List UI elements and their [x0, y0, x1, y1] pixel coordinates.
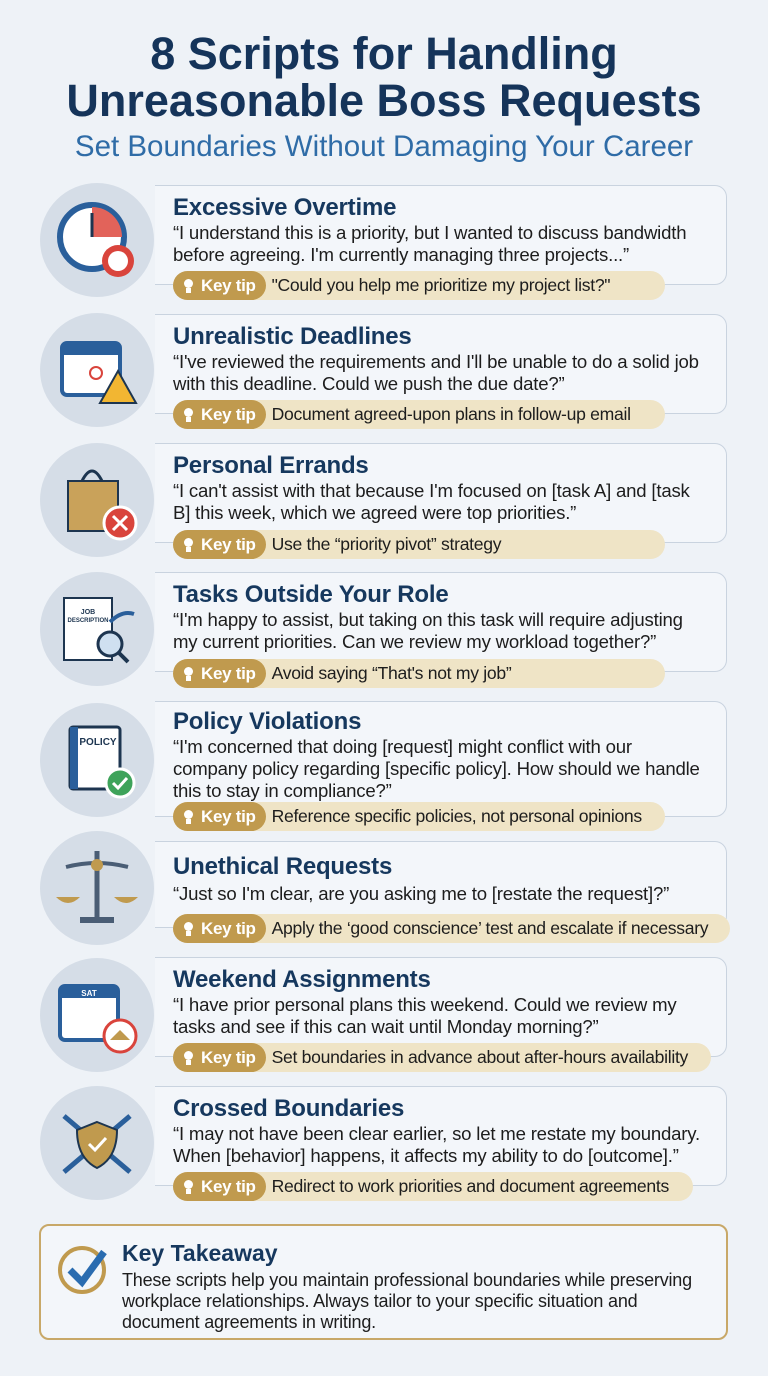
text 3: [173, 480, 690, 523]
card 5: [155, 701, 727, 817]
text 5: “I'm concerned that doing [request] might conflict with our: [173, 736, 632, 757]
card 7: [155, 957, 727, 1057]
icon: clock: [40, 183, 154, 297]
tip 3: Key tip: [201, 535, 256, 554]
card 6: [155, 841, 727, 928]
text 1: before agreeing. I'm currently managing three projects...”: [173, 244, 629, 265]
icon: policy book: [40, 703, 154, 817]
tip 4: [173, 659, 665, 688]
text 7: tasks and see if this can wait until Monday morning?”: [173, 1016, 599, 1037]
icon: scales: [40, 831, 154, 945]
tip 6: Apply the ‘good conscience’ test and escalate if necessary: [272, 918, 708, 938]
tip 8: Redirect to work priorities and document agreements: [272, 1176, 669, 1196]
text 6: “Just so I'm clear, are you asking me to [restate the request]?”: [173, 883, 669, 904]
icon: policy book: POLICY: [79, 737, 117, 748]
icon: check: [58, 1246, 107, 1294]
text 8: [173, 1123, 700, 1166]
card 1: Excessive Overtime: [155, 185, 727, 285]
tip 2: Document agreed-upon plans in follow-up email: [272, 404, 631, 424]
icon: job description: JOB: [81, 609, 95, 616]
tip 5: [173, 802, 665, 831]
tip 7: [173, 1043, 711, 1072]
tip 2: [173, 400, 665, 429]
takeaway text: [122, 1270, 692, 1332]
icon: weekend calendar: SAT: [81, 989, 97, 998]
heading 8: Crossed Boundaries: [173, 1095, 404, 1122]
text 5: company policy regarding [specific policy]. How should we handle: [173, 758, 700, 779]
icon: shopping bag: [40, 443, 154, 557]
tip 3: Use the “priority pivot” strategy: [272, 534, 501, 554]
text 1: “I understand this is a priority, but I wanted to discuss bandwidth: [173, 222, 686, 243]
text 4: [173, 609, 683, 652]
text 8: “I may not have been clear earlier, so let me restate my boundary.: [173, 1123, 700, 1144]
tip 5: Reference specific policies, not personal opinions: [272, 806, 642, 826]
text 5: [173, 736, 700, 801]
icon: job description: DESCRIPTION: [67, 618, 109, 624]
text 2: with this deadline. Could we push the due date?”: [173, 373, 564, 394]
text 3: “I can't assist with that because I'm focused on [task A] and [task: [173, 480, 690, 501]
icon: calendar warning: [40, 313, 154, 427]
text 8: When [behavior] happens, it affects my ability to do [outcome].”: [173, 1145, 679, 1166]
tip 2: Key tip: [201, 405, 256, 424]
text 5: this to stay in compliance?”: [173, 780, 392, 801]
text 2: [173, 351, 699, 394]
tip 6: Key tip: [201, 919, 256, 938]
tip 8: [173, 1172, 693, 1201]
key takeaway panel: [39, 1224, 728, 1340]
tip 4: Key tip: [201, 664, 256, 683]
tip 1: "Could you help me prioritize my project list?": [272, 275, 610, 295]
text 4: my current priorities. Can we review my workload together?”: [173, 631, 656, 652]
text 2: “I've reviewed the requirements and I'll be unable to do a solid job: [173, 351, 699, 372]
text 3: B] this week, which we agreed were top priorities.”: [173, 502, 576, 523]
heading 1: Excessive Overtime: [173, 194, 396, 221]
tip 7: Key tip: [201, 1048, 256, 1067]
text 1: [173, 222, 686, 265]
title: Unreasonable Boss Requests: [66, 75, 702, 126]
takeaway heading: Key Takeaway: [122, 1240, 278, 1266]
tip 6: [173, 914, 730, 943]
card 3: [155, 443, 727, 543]
icon: job description: [40, 572, 154, 686]
tip 1: Key tip: [201, 276, 256, 295]
takeaway text: document agreements in writing.: [122, 1312, 376, 1332]
heading 7: Weekend Assignments: [173, 966, 431, 993]
heading 3: Personal Errands: [173, 452, 369, 479]
tip 1: [173, 271, 665, 300]
takeaway text: workplace relationships. Always tailor to your specific situation and: [122, 1291, 637, 1311]
tip 7: Set boundaries in advance about after-hours availability: [272, 1047, 688, 1067]
tip 3: [173, 530, 665, 559]
heading 5: Policy Violations: [173, 708, 361, 735]
heading 4: Tasks Outside Your Role: [173, 581, 448, 608]
text 4: “I'm happy to assist, but taking on this task will require adjusting: [173, 609, 683, 630]
tip 5: Key tip: [201, 807, 256, 826]
text 7: “I have prior personal plans this weekend. Could we review my: [173, 994, 677, 1015]
card 2: [155, 314, 727, 414]
text 7: [173, 994, 677, 1037]
icon: weekend calendar: [40, 958, 154, 1072]
card 8: [155, 1086, 727, 1186]
title: [66, 28, 702, 126]
heading 6: Unethical Requests: [173, 853, 392, 880]
heading 2: Unrealistic Deadlines: [173, 323, 412, 350]
card 4: [155, 572, 727, 672]
tip 4: Avoid saying “That's not my job”: [272, 663, 511, 683]
icon: shield arrows: [40, 1086, 154, 1200]
tip 8: Key tip: [201, 1177, 256, 1196]
subtitle: Set Boundaries Without Damaging Your Career: [75, 130, 693, 163]
title: 8 Scripts for Handling: [150, 28, 618, 79]
takeaway text: These scripts help you maintain professional boundaries while preserving: [122, 1270, 692, 1290]
